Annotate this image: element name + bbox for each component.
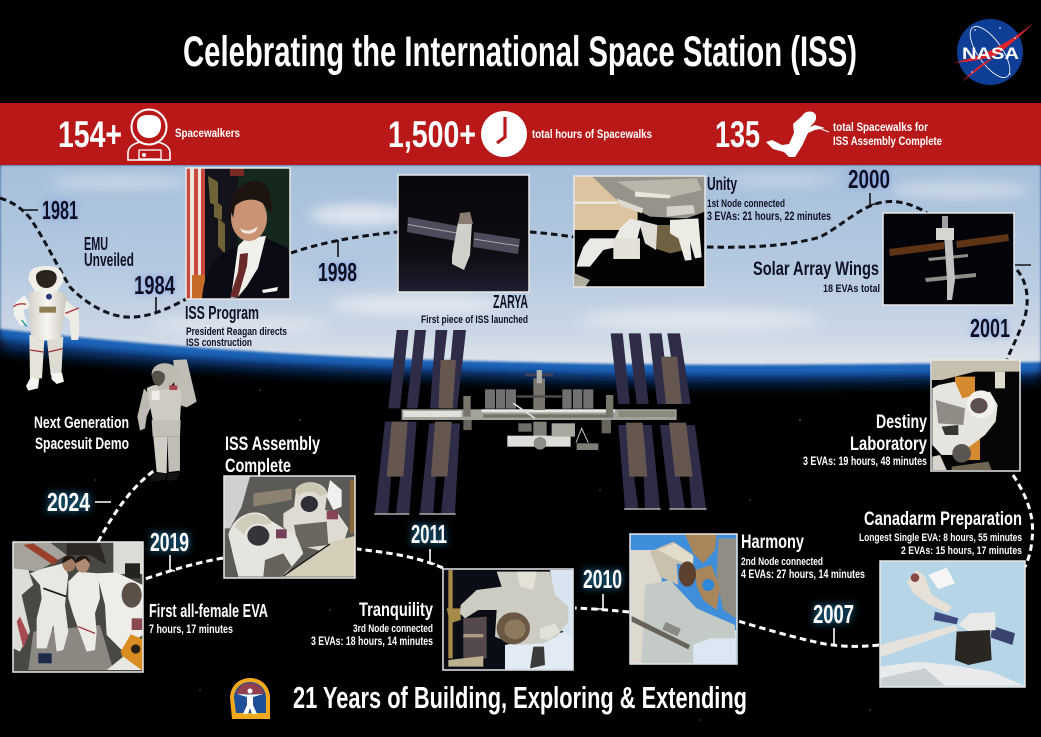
photo: Zarya module bbox=[398, 175, 529, 292]
photo: President Reagan bbox=[186, 168, 290, 299]
label: ISS Program bbox=[185, 303, 287, 349]
photo: ISS Assembly Complete bbox=[224, 476, 355, 578]
label: Harmony: 2nd Node connected bbox=[741, 556, 823, 568]
label: ZARYA bbox=[421, 292, 528, 326]
stat label: assembly spacewalks: total Spacewalks for bbox=[833, 122, 928, 134]
stars bbox=[94, 389, 871, 721]
icon: spacewalking mission patch bbox=[230, 678, 270, 719]
label: EMU unveiled: EMU bbox=[84, 234, 108, 254]
year 2019: 2019 bbox=[150, 527, 189, 557]
footer tagline: 21 Years of Building, Exploring & Extending bbox=[293, 680, 747, 715]
label: ISS Assembly Complete: Complete bbox=[225, 456, 291, 477]
timeline ticks bbox=[23, 193, 1031, 645]
label: First all-female EVA: First all-female EVA bbox=[149, 601, 268, 621]
year 2024: 2024 bbox=[47, 487, 90, 517]
ISS array end caps bbox=[374, 509, 707, 514]
label: Canadarm Preparation bbox=[859, 509, 1022, 557]
ISS array blankets bbox=[387, 357, 693, 477]
label: Tranquility: 3rd Node connected bbox=[353, 623, 433, 635]
stat: total hours: 1,500+ bbox=[388, 114, 476, 155]
central figure: International Space Station bbox=[374, 330, 707, 514]
icon: spacewalker silhouette bbox=[766, 112, 829, 157]
label: ZARYA: ZARYA bbox=[493, 292, 528, 312]
stat: spacewalkers count: 154+ bbox=[58, 114, 122, 155]
year 1981: 1981 bbox=[42, 195, 78, 225]
figure: EMU astronaut bbox=[13, 266, 79, 391]
timeline: dashed path upper segments bbox=[0, 198, 1027, 359]
label: Tranquility: 3 EVAs: 18 hours, 14 minutes bbox=[311, 634, 433, 648]
panel: statistics band bbox=[0, 103, 1041, 165]
year 2011: 2011 bbox=[411, 519, 447, 549]
year 2000: 2000 bbox=[848, 164, 890, 194]
photo: first all-female EVA crew bbox=[13, 542, 143, 672]
photo: Unity node bbox=[574, 176, 705, 287]
ISS radiators bbox=[485, 389, 593, 409]
label: ISS Program: ISS construction bbox=[186, 337, 252, 349]
label: Solar Array Wings bbox=[753, 259, 880, 295]
icon: NASA logo: NASA bbox=[962, 44, 1019, 63]
photo: Canadarm Preparation bbox=[880, 561, 1025, 687]
photo: Destiny Laboratory bbox=[931, 360, 1020, 471]
label: ISS Program: ISS Program bbox=[185, 303, 259, 323]
label: next generation spacesuit demo: Spacesuit Demo bbox=[35, 434, 129, 453]
label: First all-female EVA: 7 hours, 17 minutes bbox=[149, 622, 233, 636]
stat: spacewalks: 135 bbox=[715, 114, 760, 155]
year 1984: 1984 bbox=[134, 270, 175, 300]
year 1998: 1998 bbox=[318, 257, 357, 287]
label: ISS Assembly Complete bbox=[225, 434, 320, 477]
label: Unity bbox=[707, 174, 831, 223]
label: Unity: 3 EVAs: 21 hours, 22 minutes bbox=[707, 209, 831, 223]
label: next generation spacesuit demo bbox=[34, 413, 129, 453]
label: Harmony: Harmony bbox=[741, 532, 804, 553]
stat label: assembly spacewalks: ISS Assembly Complete bbox=[833, 136, 942, 148]
label: Tranquility bbox=[311, 600, 433, 648]
label: ZARYA: First piece of ISS launched bbox=[421, 314, 528, 326]
header bar bbox=[0, 0, 1041, 103]
stat label: hours: total hours of Spacewalks bbox=[532, 129, 652, 141]
year labels bbox=[42, 164, 1010, 629]
photo: Harmony node bbox=[630, 534, 737, 664]
label: ISS Program: President Reagan directs bbox=[186, 326, 287, 338]
label: EMU unveiled bbox=[84, 234, 134, 270]
label: Solar Array Wings: Solar Array Wings bbox=[753, 259, 879, 280]
label: Destiny Laboratory: Laboratory bbox=[850, 434, 927, 455]
label: Solar Array Wings: 18 EVAs total bbox=[823, 283, 880, 295]
label: Harmony: 4 EVAs: 27 hours, 14 minutes bbox=[741, 567, 865, 581]
label: Destiny Laboratory: Destiny bbox=[876, 412, 927, 433]
timeline: dashed path lower segments bbox=[98, 470, 1033, 646]
label: ISS Assembly Complete: ISS Assembly bbox=[225, 434, 320, 455]
figure: next generation spacesuit bbox=[137, 359, 197, 482]
year 2010: 2010 bbox=[583, 564, 622, 594]
label: Unity: Unity bbox=[707, 174, 737, 194]
label: First all-female EVA bbox=[149, 601, 268, 636]
label: Unity: 1st Node connected bbox=[707, 198, 785, 210]
icon: astronaut helmet bbox=[128, 110, 170, 160]
year 2001: 2001 bbox=[970, 313, 1010, 343]
label: next generation spacesuit demo: Next Generation bbox=[34, 413, 129, 432]
label: Harmony bbox=[741, 532, 865, 581]
photo: Tranquility node bbox=[443, 569, 573, 670]
stat label: assembly spacewalks bbox=[833, 122, 942, 148]
icon: clock bbox=[481, 111, 527, 157]
label: EMU unveiled: Unveiled bbox=[84, 250, 134, 270]
year 2007: 2007 bbox=[813, 599, 854, 629]
ISS modules bbox=[507, 370, 598, 450]
label: Destiny Laboratory: 3 EVAs: 19 hours, 48 minutes bbox=[803, 454, 927, 468]
ISS solar arrays bbox=[375, 330, 706, 513]
icon: NASA logo bbox=[953, 19, 1033, 85]
ISS main truss bbox=[402, 395, 677, 433]
background: earth sky and horizon bbox=[0, 165, 1041, 383]
photo: Solar Array Wings bbox=[883, 213, 1014, 305]
stat label: spacewalkers: Spacewalkers bbox=[175, 128, 240, 140]
label: Destiny Laboratory bbox=[803, 412, 927, 468]
label: Tranquility: Tranquility bbox=[359, 600, 433, 621]
